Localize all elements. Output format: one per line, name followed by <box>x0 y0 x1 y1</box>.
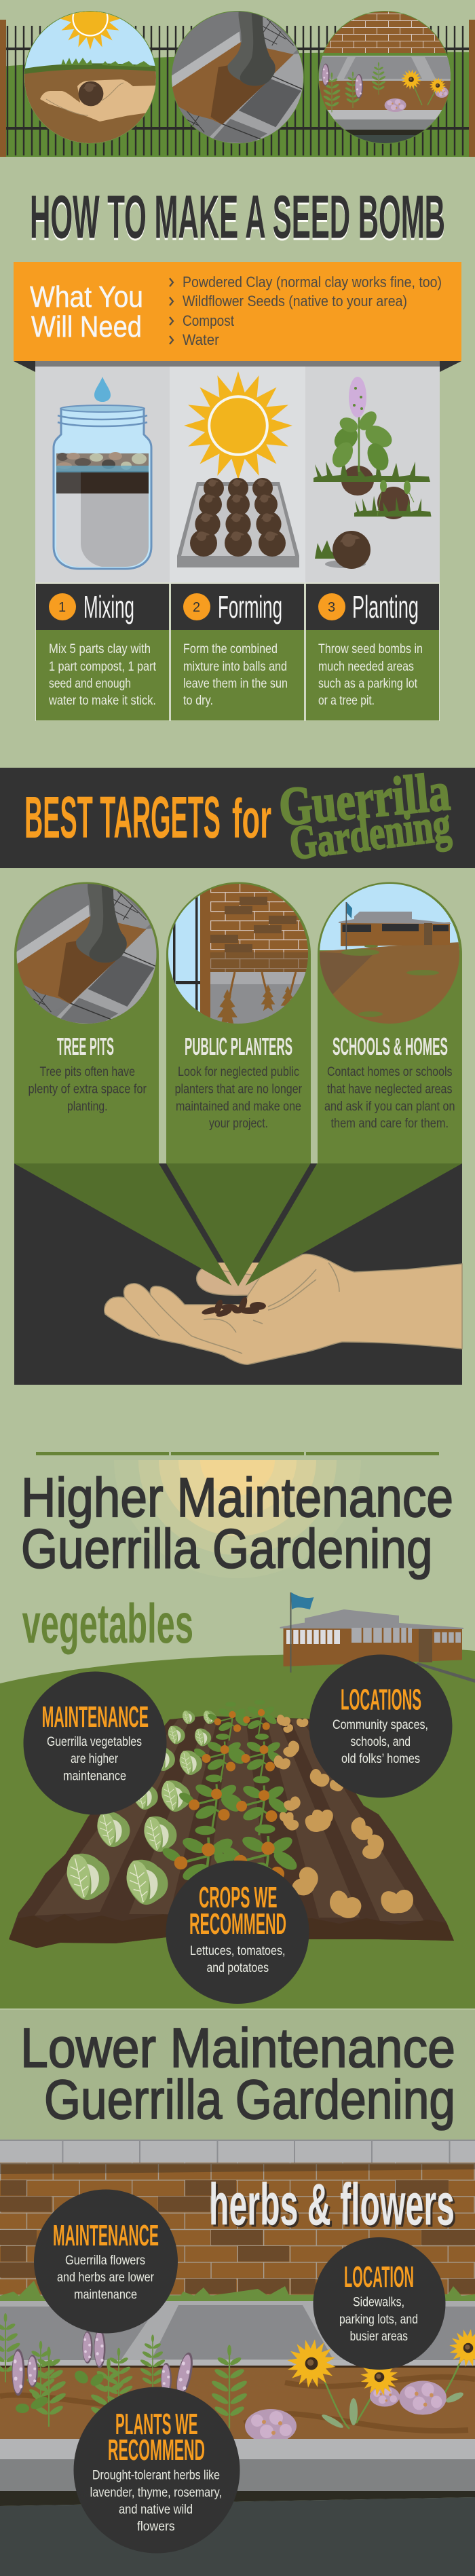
card: public planters: PUBLIC PLANTERS <box>185 1032 292 1060</box>
callout: crops we recommend: RECOMMEND <box>189 1907 286 1941</box>
description: public planters: planters that are no longer <box>175 1083 303 1097</box>
vegetable field scene <box>0 1592 475 2009</box>
callout: plants we recommend: lavender, thyme, rosemary, <box>90 2486 222 2500</box>
callout: plants we recommend <box>73 2387 240 2554</box>
step 3 header <box>306 584 439 630</box>
description: public planters <box>175 1065 303 1131</box>
image: neglected planter <box>168 882 309 1027</box>
callout: plants we recommend: PLANTS WE <box>115 2408 198 2441</box>
callout: plants we recommend: Drought-tolerant herbs like <box>92 2469 220 2483</box>
callout: vegetables maintenance: are higher <box>71 1752 119 1766</box>
callout: herbs location: parking lots, and <box>339 2313 418 2327</box>
potatoes <box>272 1714 415 1922</box>
concrete back wall <box>0 2301 475 2366</box>
step 1 description <box>36 630 169 721</box>
icon: water drop <box>94 377 111 402</box>
icon: seed bomb <box>79 81 103 106</box>
icon: sun <box>60 12 120 50</box>
card: tree pits: TREE PITS <box>57 1032 114 1060</box>
panel: lower maintenance title <box>0 2009 475 2140</box>
step 1 header: Mixing <box>83 589 134 624</box>
heading: what you will need: What You <box>30 280 143 314</box>
step 1 description: water to make it stick. <box>48 694 156 708</box>
header fence scene <box>0 20 475 157</box>
callout: crops we recommend: and potatoes <box>206 1961 269 1975</box>
callout: vegetables maintenance <box>23 1671 167 1815</box>
circle: public planter with flowers <box>316 7 454 146</box>
banner: best targets for guerrilla gardening: BEST TARGETS <box>24 785 221 851</box>
callout: herbs maintenance: and herbs are lower <box>57 2271 155 2285</box>
herbs and lavender <box>0 2313 248 2442</box>
callout: herbs location: busier areas <box>350 2330 408 2344</box>
planter front and pavement <box>0 2439 475 2576</box>
description: public planters: your project. <box>209 1117 268 1131</box>
panel: what you will need <box>14 262 461 361</box>
image: tree pit <box>16 884 156 1024</box>
panel: hand and seed funnel <box>14 1163 462 1385</box>
banner: best targets for guerrilla gardening: for <box>232 788 271 850</box>
heading: vegetables: vegetables <box>22 1593 193 1655</box>
sun glow <box>114 1460 361 1578</box>
banner: best targets for guerrilla gardening <box>0 762 475 870</box>
callout: herbs maintenance <box>34 2190 178 2334</box>
callout: herbs maintenance: Guerrilla flowers <box>65 2254 145 2268</box>
icon: hand holding seeds <box>104 1254 462 1364</box>
step 1 description: seed and enough <box>49 677 131 691</box>
description: tree pits: plenty of extra space for <box>28 1083 147 1097</box>
icon: planted seed bombs growing <box>314 377 432 569</box>
folded ribbon ends <box>14 361 461 372</box>
school building <box>280 1592 475 1683</box>
callout: plants we recommend: RECOMMEND <box>108 2433 205 2467</box>
callout: herbs maintenance: maintenance <box>74 2288 137 2302</box>
card: public planters <box>166 882 311 1163</box>
card: schools and homes <box>316 882 465 1163</box>
description: schools and homes: them and care for them. <box>331 1117 449 1131</box>
ingredient list: Powdered Clay (normal clay works fine, too) <box>183 274 442 291</box>
step 2 header: Forming <box>218 589 282 624</box>
step 3 description: much needed areas <box>318 660 414 674</box>
planter scene <box>0 2140 475 2576</box>
callout: herbs location: Sidewalks, <box>353 2296 404 2310</box>
description: schools and homes <box>324 1065 455 1131</box>
step 2 description: to dry. <box>183 694 213 708</box>
heading: what you will need <box>30 280 143 343</box>
tomato plants <box>160 1700 300 1899</box>
step 3: planting <box>305 582 440 721</box>
step 1 header <box>36 584 169 630</box>
lettuces <box>67 1711 216 1905</box>
icon: jar with layers <box>54 377 151 569</box>
wild flowers <box>245 2326 475 2443</box>
step 3 description: such as a parking lot <box>318 677 418 691</box>
icon: open hand <box>40 79 157 122</box>
seed funnel triangles <box>14 1163 462 1286</box>
callout: vegetables maintenance: MAINTENANCE <box>42 1700 149 1734</box>
description: public planters: Look for neglected public <box>178 1065 299 1079</box>
step 1 description: Mix 5 parts clay with <box>49 642 151 656</box>
image: school with neglected ground <box>316 882 465 1025</box>
step 2: forming <box>170 582 305 721</box>
coping stone <box>0 2140 475 2163</box>
step 1 header: 1 <box>58 600 66 615</box>
description: schools and homes: that have neglected areas <box>327 1083 452 1097</box>
ingredient list: Wildflower Seeds (native to your area) <box>183 293 407 310</box>
step 3 description: or a tree pit. <box>318 694 375 708</box>
step 3 header: Planting <box>352 589 419 624</box>
callout: vegetables maintenance: maintenance <box>63 1770 126 1784</box>
step 2 description: mixture into balls and <box>183 660 287 674</box>
callout: crops we recommend: CROPS WE <box>199 1881 277 1914</box>
brick wall <box>0 2163 475 2301</box>
callout: vegetables maintenance: Guerrilla vegetables <box>47 1735 142 1749</box>
step 2 header: 2 <box>193 600 200 615</box>
panel: illustrations background <box>35 361 440 584</box>
title: higher maintenance guerrilla gardening <box>21 1467 453 1580</box>
step 2 description: Form the combined <box>183 642 278 656</box>
soil mound <box>9 1716 454 1948</box>
circle: hand holding seed bomb <box>24 11 156 144</box>
divider bars <box>36 1452 439 1455</box>
callout: crops we recommend: Lettuces, tomatoes, <box>190 1944 285 1958</box>
callout: plants we recommend: flowers <box>137 2520 175 2534</box>
step 1: mixing <box>35 582 170 721</box>
callout: vegetables locations: old folks’ homes <box>341 1752 420 1766</box>
heading: what you will need: Will Need <box>31 310 142 343</box>
callout: vegetables locations <box>309 1655 452 1797</box>
description: tree pits <box>28 1065 147 1114</box>
callout: crops we recommend <box>166 1861 309 2004</box>
callout: plants we recommend: and native wild <box>119 2503 193 2517</box>
icon: sun and tray of seed bombs <box>177 371 299 567</box>
description: public planters: maintained and make one <box>176 1100 301 1114</box>
callout: herbs location <box>314 2237 445 2370</box>
seeds <box>201 1296 266 1318</box>
step 2 description <box>171 630 304 721</box>
step 3 description: Throw seed bombs in <box>318 642 423 656</box>
step 3 header: 3 <box>328 600 335 615</box>
step 2 description: leave them in the sun <box>183 677 288 691</box>
step 2 header <box>171 584 304 630</box>
callout: vegetables locations: schools, and <box>350 1735 411 1749</box>
soil bed <box>0 2366 475 2439</box>
card: tree pits <box>11 879 168 1163</box>
description: tree pits: Tree pits often have <box>39 1065 135 1079</box>
callout: herbs maintenance: MAINTENANCE <box>53 2219 159 2252</box>
ingredient list: Water <box>183 331 219 348</box>
callout: vegetables locations: Community spaces, <box>332 1718 428 1732</box>
description: schools and homes: and ask if you can plant on <box>324 1100 455 1114</box>
green hill <box>0 1649 475 2009</box>
circle: tree pit <box>172 11 304 144</box>
description: tree pits: planting. <box>67 1100 107 1114</box>
description: schools and homes: Contact homes or schools <box>327 1065 452 1079</box>
step 3 description <box>306 630 439 721</box>
ingredient list <box>170 274 442 348</box>
ingredient list: Compost <box>183 312 234 329</box>
step 1 description: 1 part compost, 1 part <box>49 660 157 674</box>
